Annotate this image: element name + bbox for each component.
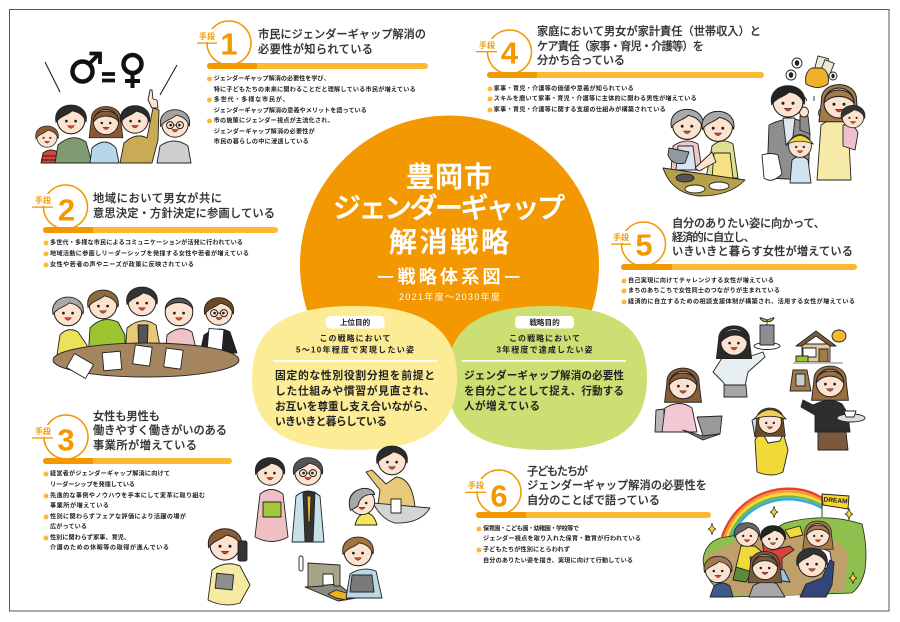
heading — [527, 464, 707, 507]
illustration: kimono woman and suited man — [255, 458, 324, 542]
icon: purse and coins — [786, 56, 837, 101]
bullet list: 自己実現に向けてチャレンジする女性が増えている — [628, 276, 774, 284]
icon: male equals female — [45, 54, 177, 95]
heading: 自分のありたい姿に向かって、 — [672, 216, 825, 230]
panel: strategy 6 — [465, 464, 711, 564]
bullet list: まちのあちこちで女性同士のつながりが生まれている — [628, 286, 780, 294]
illustration: woman on the phone — [208, 529, 250, 605]
badge: 手段6 — [465, 470, 521, 514]
panel: strategy 4 — [476, 24, 764, 114]
illustration: community meeting — [53, 287, 239, 378]
heading: 分かち合っている — [537, 53, 625, 67]
illustration: children running under a rainbow — [703, 489, 866, 597]
bullet list: 自分のありたい姿を描き、実現に向けて行動している — [483, 556, 633, 564]
text: upper goal — [275, 368, 435, 428]
bullet list: 市民の暮らしの中に浸透している — [214, 138, 309, 146]
bullet list: リーダーシップを発揮している — [50, 480, 135, 488]
badge: 手段6: 手段 — [468, 480, 484, 490]
heading — [258, 27, 426, 56]
badge: 手段4 — [476, 30, 532, 74]
panel: strategy 2 — [32, 185, 278, 268]
badge: 戦略目的 — [515, 316, 574, 328]
illustration: working parents with children — [762, 85, 865, 183]
text: strategic goal: を自分ごととして捉え、行動する — [464, 384, 624, 398]
heading: 女性も男性も — [93, 409, 160, 423]
subheading: green lobe — [496, 333, 592, 354]
bullet list — [622, 276, 855, 306]
text: strategic goal: 人が増えている — [464, 400, 540, 412]
heading: 事業所が増えている — [93, 438, 197, 452]
badge: 手段3: 手段 — [35, 426, 51, 436]
bar — [43, 458, 232, 464]
heading: 働きやすく働きがいのある — [93, 423, 227, 437]
text: upper goal: お互いを尊重し支え合いながら、 — [275, 399, 434, 413]
sparkles — [708, 506, 857, 584]
bullet list — [488, 84, 697, 114]
heading: いきいきと暮らす女性が増えている — [672, 244, 853, 258]
heading: 意思決定・方針決定に参画している — [93, 206, 275, 220]
bullet list: 家事・育児・介護等の価値や意義が知られている — [494, 84, 634, 92]
panel: strategy 3 — [32, 409, 232, 552]
badge: 手段2 — [32, 185, 88, 229]
bullet list: 事業所が増えている — [50, 502, 109, 510]
badge: 手段3: 3 — [57, 422, 75, 458]
badge: 手段1: 1 — [220, 26, 238, 62]
title: ジェンダーギャップ — [333, 192, 565, 224]
bullet list: 多世代・多様な市民によるコミュニケーションが活発に行われている — [50, 238, 243, 246]
bullet list: 先進的な事例やノウハウを手本にして変革に取り組む — [50, 492, 205, 500]
illustration: cafe shop and signboard — [790, 330, 846, 391]
dirt path — [706, 533, 848, 596]
rainbow — [722, 489, 822, 537]
subheading: yellow lobe: この戦略において — [320, 333, 390, 343]
bullet list: 介護のための休暇等の取得が進んでいる — [50, 544, 169, 552]
heading: 子どもたちが — [527, 464, 588, 478]
subheading: yellow lobe: 5～10年程度で実現したい姿 — [296, 344, 414, 354]
bullet list — [476, 524, 641, 564]
heading: 自分のことばで語っている — [527, 494, 660, 507]
bullet list: ジェンダーギャップ解消の意義やメリットを語っている — [214, 106, 367, 114]
bullet list — [44, 470, 205, 552]
heading — [537, 24, 761, 67]
bullet list: 特に子どもたちの未来に関わることだと理解している市民が増えている — [214, 86, 416, 94]
illustration: older couple cooking — [663, 109, 745, 196]
illustration: businesswoman with tray — [713, 318, 780, 397]
subheading: green lobe: 3年程度で達成したい姿 — [496, 344, 592, 354]
heading — [93, 409, 227, 452]
badge: 上位目的 — [326, 316, 384, 328]
subheading: yellow lobe — [296, 333, 414, 354]
badge: 手段4: 4 — [501, 36, 519, 70]
text: upper goal: 固定的な性別役割分担を前提と — [275, 368, 435, 382]
bullet list: 広がっている — [50, 522, 87, 530]
bullet list: 多世代・多様な市民が、 — [214, 96, 289, 104]
heading — [93, 191, 275, 220]
bullet list: 性別に関わらずフェアな評価により活躍の場が — [50, 512, 186, 520]
bar — [476, 512, 711, 518]
flag — [822, 494, 849, 517]
bullet list — [44, 238, 249, 268]
bullet list: 性別に関わらず家事、育児、 — [50, 534, 130, 542]
subheading: green lobe: この戦略において — [509, 333, 580, 343]
bar — [487, 72, 764, 78]
bullet list: 家事・育児・介護等に関する支援の仕組みが構築されている — [494, 106, 666, 114]
bar — [621, 264, 857, 270]
panel: strategic goal (green lobe) — [447, 306, 647, 450]
bullet list: ジェンダーギャップ解消の必要性を学び、 — [214, 74, 330, 82]
badge: 手段2: 2 — [58, 192, 75, 228]
heading: 市民にジェンダーギャップ解消の — [258, 27, 426, 41]
text: strategic goal: ジェンダーギャップ解消の必要性 — [464, 369, 624, 382]
panel: upper goal (yellow lobe) — [252, 306, 457, 450]
text: upper goal: いきいきと暮らしている — [275, 414, 387, 428]
title: 解消戦略 — [389, 226, 509, 258]
badge: 手段3 — [32, 415, 88, 459]
text: upper goal: した仕組みや慣習が見直され、 — [275, 384, 435, 398]
bullet list: 女性や若者の声やニーズが政策に反映されている — [50, 260, 194, 268]
badge: 手段5: 手段 — [613, 232, 629, 242]
illustration: man at counter with older woman — [349, 446, 430, 525]
illustration: girl with straw hat and vegetables — [752, 408, 788, 475]
badge: 手段6: 6 — [490, 478, 508, 514]
text: strategic goal — [464, 369, 624, 412]
badge: 手段5 — [610, 222, 666, 266]
illustration: sewing worker — [299, 537, 382, 601]
illustration: family of citizens — [36, 90, 191, 163]
badge: 手段1: 手段 — [199, 31, 215, 41]
bullet list: スキルを磨いて家事・育児・介護等に主体的に関わる男性が増えている — [494, 94, 697, 102]
subtitle: 戦略体系図: 戦略体系図 — [398, 267, 500, 287]
central orange circle — [300, 115, 599, 380]
illustration: waitress — [801, 366, 865, 450]
bullet list: 市の施策にジェンダー視点が主流化され、 — [214, 116, 334, 124]
heading: 経済的に自立し、 — [672, 230, 755, 244]
heading — [672, 216, 853, 258]
green hills — [703, 518, 866, 597]
bullet list: 地域活動に参画しリーダーシップを発揮する女性や若者が増えている — [50, 250, 249, 258]
badge: 手段2: 手段 — [35, 195, 51, 205]
bullet list: 経営者がジェンダーギャップ解消に向けて — [50, 470, 170, 478]
heading: 地域において男女が共に — [93, 191, 222, 205]
bar — [43, 227, 278, 233]
heading: 家庭において男女が家計責任（世帯収入）と — [537, 24, 761, 38]
badge: 戦略目的: 戦略目的 — [529, 317, 560, 327]
badge: 上位目的: 上位目的 — [340, 317, 371, 327]
bullet list: ジェンダー視点を取り入れた保育・教育が行われている — [483, 534, 641, 542]
title: 豊岡市 — [406, 162, 492, 192]
heading: ジェンダーギャップ解消の必要性を — [527, 478, 707, 492]
children — [704, 521, 834, 597]
badge: 手段1 — [196, 21, 251, 65]
bar — [207, 63, 428, 69]
bullet list: ジェンダーギャップ解消の必要性が — [214, 128, 315, 136]
panel: strategy 5 — [610, 216, 857, 306]
bullet list: 子どもたちが性別にとらわれず — [483, 546, 570, 554]
badge: 手段5: 5 — [635, 228, 653, 262]
flag: DREAM — [823, 496, 848, 506]
badge: 手段4: 手段 — [479, 40, 495, 50]
bullet list: 保育園・こども園・幼稚園・学校等で — [483, 524, 579, 532]
bullet list — [207, 74, 416, 146]
illustration: woman at laptop — [655, 368, 722, 440]
title — [333, 162, 565, 258]
bullet list: 経済的に自立するための相談支援体制が構築され、活用する女性が増えている — [628, 298, 855, 306]
panel: strategy 1 — [196, 21, 428, 146]
heading: ケア責任（家事・育児・介護等）を — [537, 39, 704, 53]
period: 2021年度～2030年度 — [399, 291, 500, 302]
heading: 必要性が知られている — [258, 42, 373, 56]
